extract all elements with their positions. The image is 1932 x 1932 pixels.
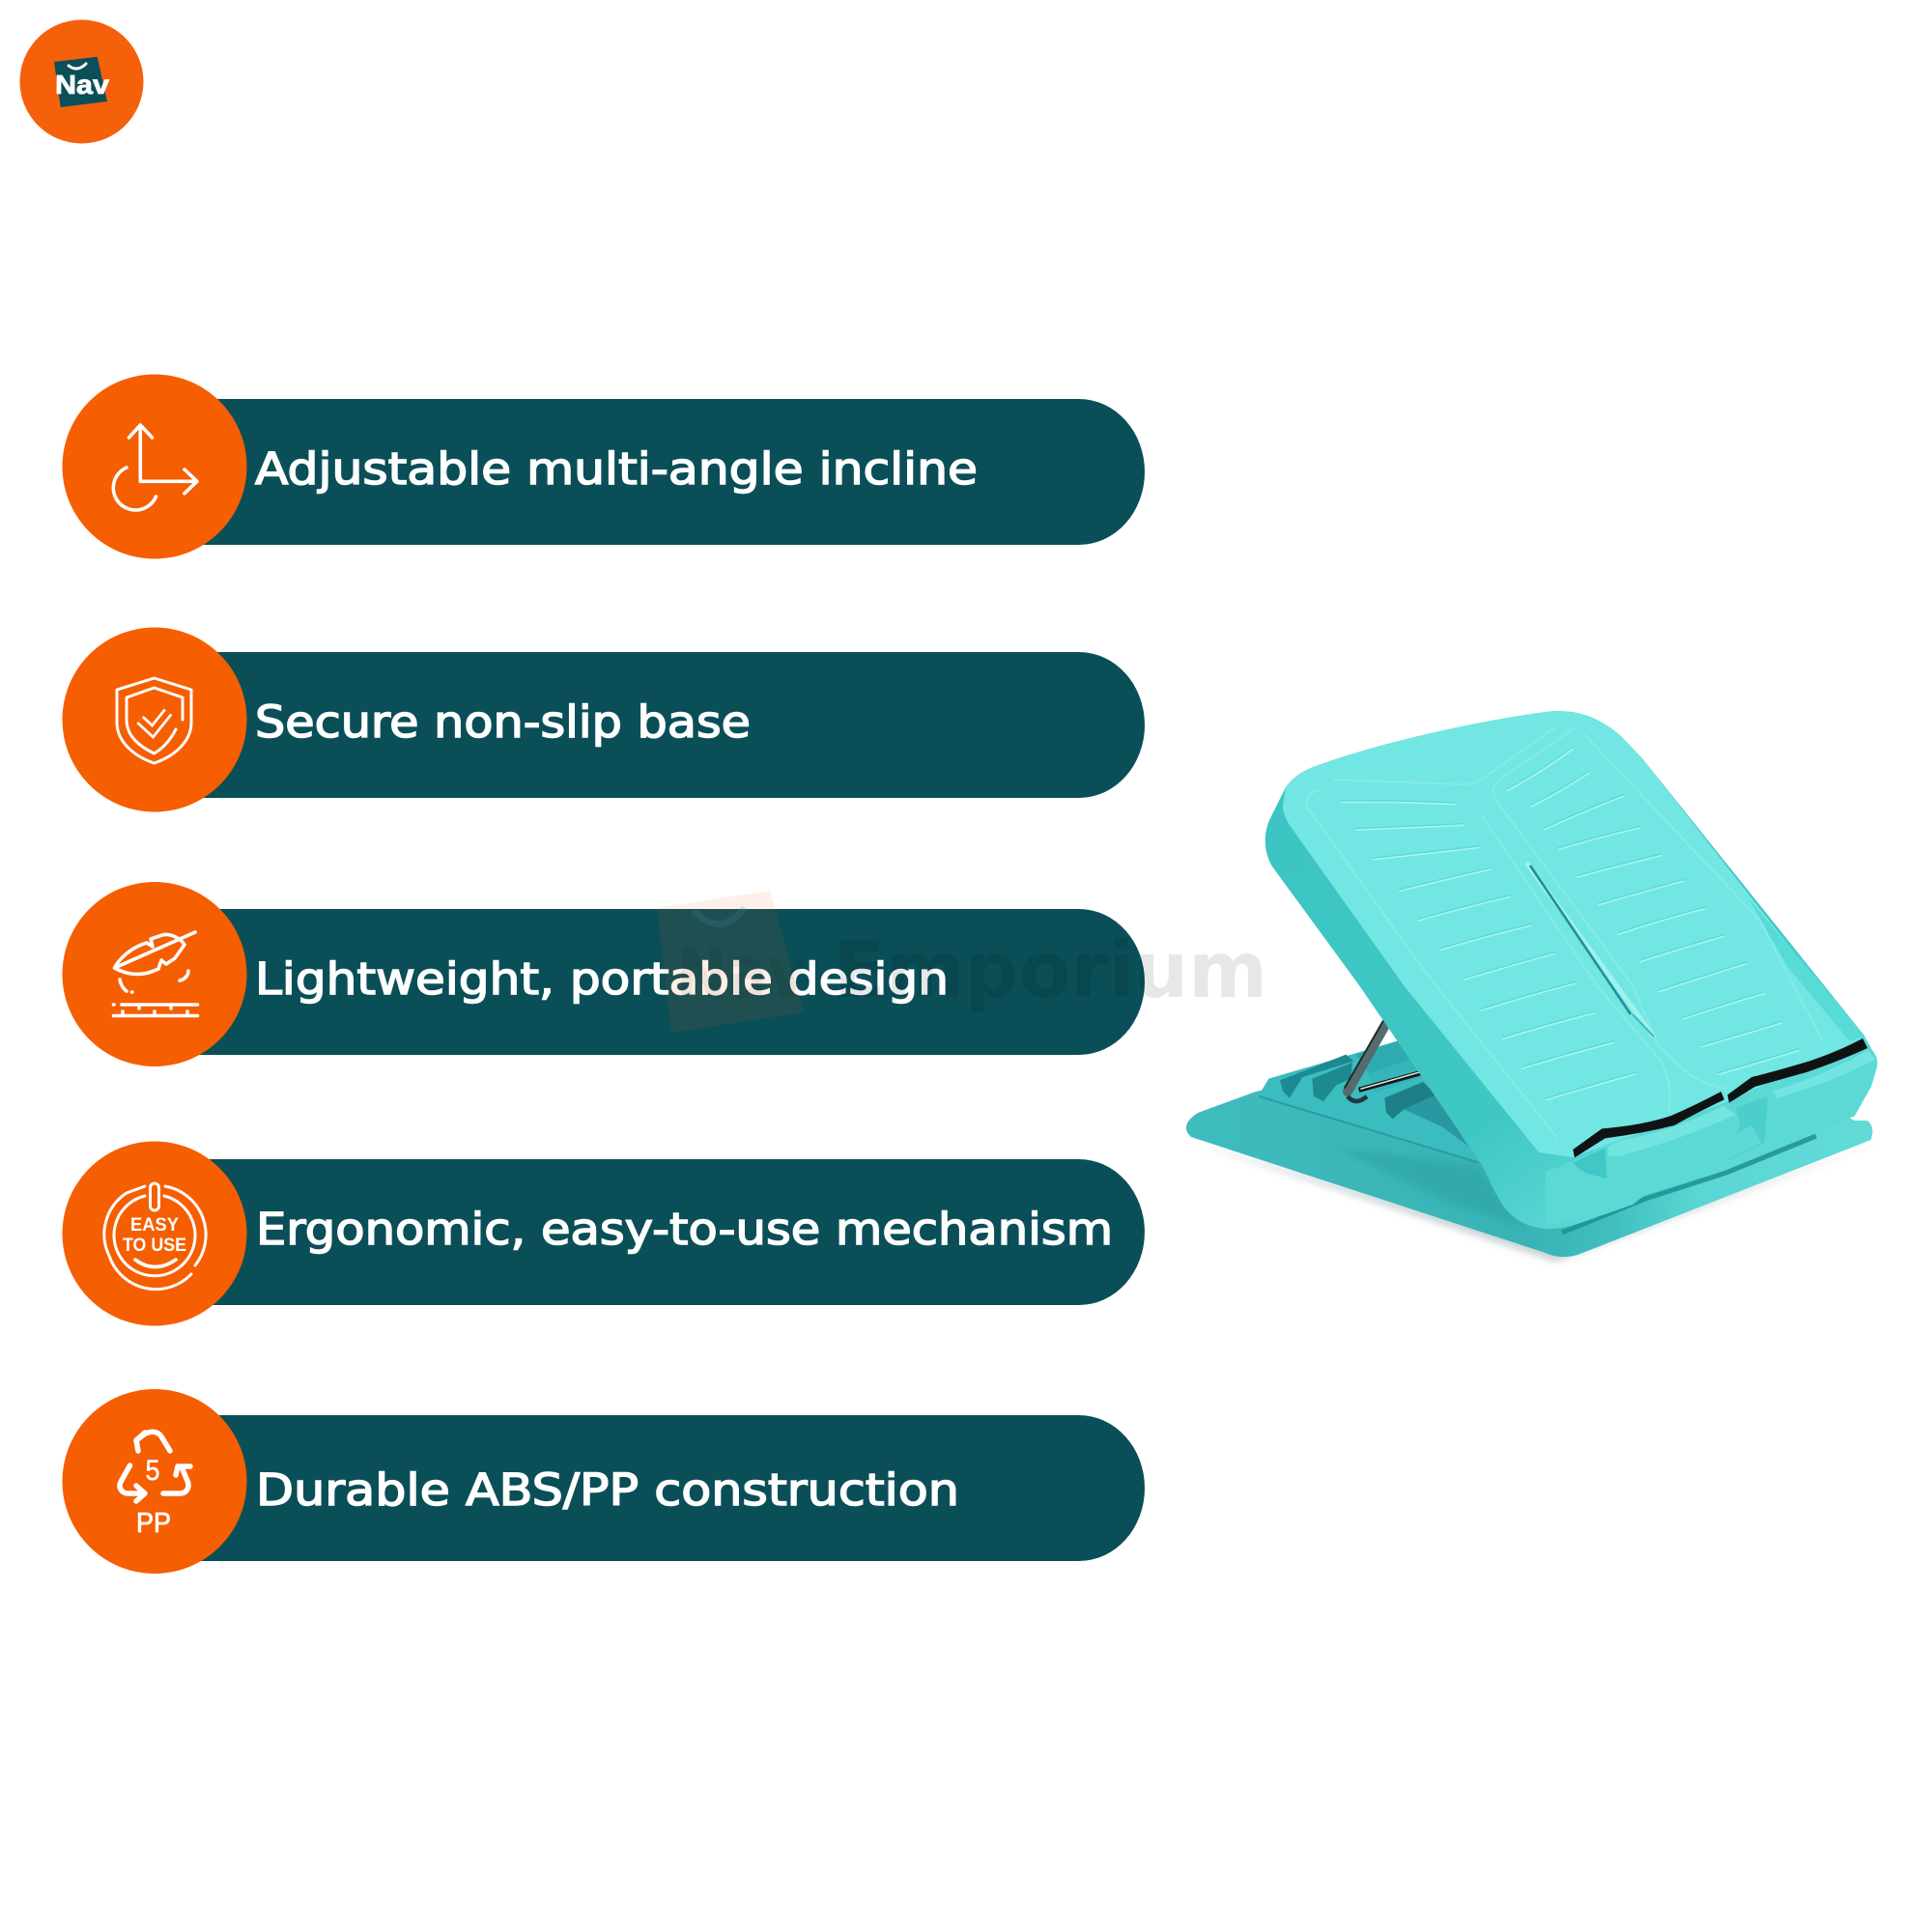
watermark: Nav Emporium bbox=[657, 891, 1267, 1033]
rib shadows bbox=[1342, 748, 1799, 1098]
board top face bbox=[1283, 711, 1861, 1157]
shadow under board bbox=[1191, 1142, 1876, 1262]
label: non-slip base: Secure non-slip base bbox=[255, 696, 751, 748]
icon circle: easy to use: EASY bbox=[130, 1215, 179, 1236]
front lips and rubber strips bbox=[1546, 1038, 1877, 1225]
watermark: Nav Emporium: Emporium bbox=[834, 925, 1267, 1015]
notch between lips bbox=[1729, 1096, 1768, 1159]
base plate soft shade bbox=[1333, 1147, 1521, 1227]
lip highlight left bbox=[1608, 1106, 1736, 1156]
feature row: durable bbox=[62, 1389, 1145, 1574]
feature row: lightweight bbox=[62, 882, 1145, 1066]
icon circle: angle arrows bbox=[62, 375, 247, 558]
pocket left bbox=[1573, 1148, 1606, 1179]
black strip right bbox=[1727, 1038, 1867, 1103]
label: ergonomic: Ergonomic, easy-to-use mechanism bbox=[256, 1204, 1113, 1255]
feature row: adjustable incline bbox=[62, 375, 1145, 558]
contact shadow under board front bbox=[1562, 1136, 1816, 1233]
black strip left bbox=[1573, 1092, 1724, 1157]
board body bbox=[1265, 711, 1877, 1229]
ribs on panels bbox=[1342, 748, 1799, 1100]
center slot bbox=[1526, 863, 1654, 1037]
bar: ergonomic bbox=[184, 1159, 1145, 1305]
base plate bbox=[1186, 1063, 1872, 1257]
label: durable: Durable ABS/PP construction bbox=[256, 1464, 959, 1516]
icon circle: shield bbox=[62, 628, 247, 811]
front lip left bbox=[1546, 1104, 1741, 1225]
ridged riser with slots bbox=[1259, 1021, 1481, 1162]
feature row: ergonomic bbox=[62, 1142, 1145, 1325]
watermark: Nav Emporium: Nav bbox=[676, 932, 807, 1013]
bar: non-slip base bbox=[184, 652, 1145, 798]
right rim bbox=[1748, 898, 1864, 1041]
icon circle: recycling PP 5 bbox=[62, 1389, 247, 1574]
feature row: non-slip base bbox=[62, 628, 1145, 811]
panel outlines bbox=[1307, 727, 1823, 1138]
label: lightweight: Lightweight, portable design bbox=[255, 953, 949, 1005]
rib highlights bbox=[1342, 749, 1799, 1100]
label: adjustable incline: Adjustable multi-angle incline bbox=[255, 443, 978, 495]
icon circle: recycling PP 5: 5 bbox=[145, 1455, 160, 1487]
icon circle: recycling PP 5: PP bbox=[136, 1508, 171, 1539]
bar: lightweight bbox=[184, 909, 1145, 1055]
icon circle: easy to use: TO USE bbox=[123, 1236, 186, 1256]
icon circle: easy to use bbox=[62, 1142, 247, 1325]
bar: adjustable incline bbox=[184, 399, 1145, 545]
front lip right bbox=[1765, 1050, 1877, 1143]
product image: adjustable incline board bbox=[1186, 711, 1877, 1262]
bar: durable bbox=[184, 1415, 1145, 1561]
logo: Nav badge bbox=[19, 19, 143, 143]
icon circle: feather bbox=[62, 882, 247, 1066]
logo: Nav badge: Nav bbox=[55, 70, 109, 99]
